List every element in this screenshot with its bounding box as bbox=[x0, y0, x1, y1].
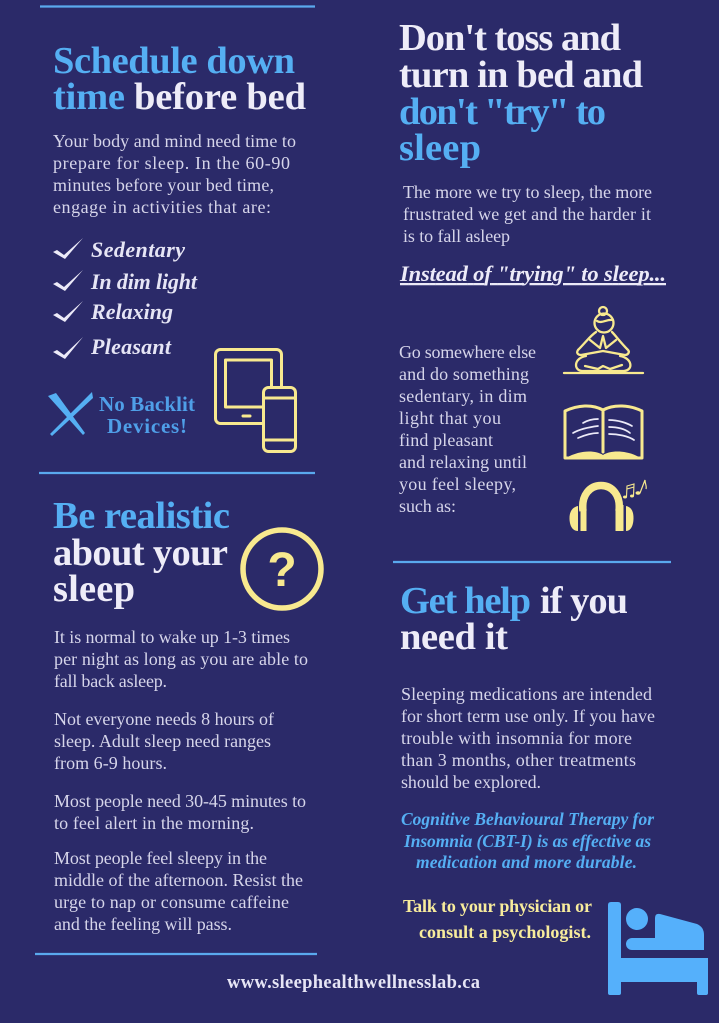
icon: question mark bbox=[243, 530, 321, 608]
text block: morning alertness: Most people need 30-45 minutes to bbox=[54, 791, 306, 811]
heading: be realistic about your sleep: sleep bbox=[53, 568, 135, 610]
text block: trying to sleep: The more we try to sleep, the more bbox=[403, 182, 652, 202]
item: pleasant: Pleasant bbox=[90, 334, 172, 359]
icon: person in bed bbox=[608, 902, 708, 995]
text block: afternoon sleepiness: middle of the afternoon. Resist the bbox=[54, 870, 303, 890]
callout: cognitive behavioural therapy: medication and more durable. bbox=[416, 852, 637, 872]
text block: sleeping medications: should be explored. bbox=[401, 772, 541, 792]
text block: prepare for sleep: engage in activities that are: bbox=[53, 197, 271, 217]
text block: afternoon sleepiness bbox=[54, 848, 303, 934]
text block: go somewhere else: and do something bbox=[399, 364, 529, 384]
heading: don't toss and turn: don't "try" to bbox=[399, 91, 606, 133]
text block: go somewhere else: find pleasant bbox=[399, 430, 493, 450]
item: pleasant bbox=[53, 334, 172, 359]
text block: go somewhere else bbox=[399, 342, 536, 516]
heading: don't toss and turn: sleep bbox=[399, 127, 481, 169]
heading: get help: Get help bbox=[400, 580, 531, 622]
heading: schedule down time before bed: time bbox=[53, 76, 125, 118]
heading: get help: if you bbox=[540, 580, 628, 622]
text block: sleeping medications bbox=[401, 684, 655, 792]
text block: trying to sleep: frustrated we get and the harder it bbox=[403, 204, 651, 224]
website url: www.sleephealthwellnesslab.ca bbox=[227, 973, 480, 993]
text block: sleeping medications: Sleeping medications are intended bbox=[401, 684, 652, 704]
heading: schedule down time before bed: before bed bbox=[134, 76, 306, 118]
text block: trying to sleep: is to fall asleep bbox=[403, 226, 510, 246]
heading: schedule down time before bed: Schedule down bbox=[53, 40, 295, 82]
text block: sleep need: Not everyone needs 8 hours of bbox=[54, 709, 274, 729]
text block: go somewhere else: and relaxing until bbox=[399, 452, 527, 472]
checklist: recommended activities bbox=[53, 237, 198, 359]
label: no backlit devices: No Backlit bbox=[99, 392, 195, 416]
label: no backlit devices bbox=[99, 392, 195, 438]
icon: blue cross bbox=[48, 392, 93, 436]
icon: open book bbox=[565, 406, 642, 458]
heading: be realistic about your sleep: Be realistic bbox=[53, 495, 230, 537]
text block: sleeping medications: trouble with insomnia for more bbox=[401, 728, 632, 748]
text block: waking at night bbox=[54, 627, 308, 691]
heading: schedule down time before bed bbox=[53, 40, 306, 118]
text block: go somewhere else: you feel sleepy, bbox=[399, 474, 516, 494]
text block: prepare for sleep: minutes before your bed time, bbox=[53, 175, 274, 195]
text block: go somewhere else: light that you bbox=[399, 408, 501, 428]
heading: be realistic about your sleep: about your bbox=[53, 532, 228, 574]
heading: get help bbox=[400, 580, 628, 658]
callout: cognitive behavioural therapy: Cognitive Behavioural Therapy for bbox=[401, 809, 654, 829]
text block: prepare for sleep: Your body and mind need time to bbox=[53, 131, 296, 151]
subheading: instead of trying: Instead of "trying" to sleep... bbox=[399, 261, 666, 286]
text block: waking at night: fall back asleep. bbox=[54, 671, 167, 691]
text block: sleeping medications: for short term use only. If you have bbox=[401, 706, 655, 726]
heading: be realistic about your sleep bbox=[53, 495, 230, 610]
text block: sleep need: from 6-9 hours. bbox=[54, 753, 167, 773]
icon: meditating person bbox=[564, 307, 643, 373]
icon: tablet and phone bbox=[216, 350, 296, 452]
item: in dim light: In dim light bbox=[90, 269, 198, 294]
callout: cognitive behavioural therapy bbox=[401, 809, 654, 872]
text block: afternoon sleepiness: and the feeling will pass. bbox=[54, 914, 232, 934]
text block: morning alertness bbox=[54, 791, 306, 833]
heading: don't toss and turn: Don't toss and bbox=[399, 17, 621, 59]
text block: go somewhere else: such as: bbox=[399, 496, 456, 516]
text block: prepare for sleep: prepare for sleep. In the 60-90 bbox=[53, 153, 290, 173]
item: relaxing bbox=[53, 299, 173, 324]
text block: waking at night: It is normal to wake up 1-3 times bbox=[54, 627, 290, 647]
heading: don't toss and turn bbox=[399, 17, 643, 169]
icon: question mark: ? bbox=[267, 544, 297, 597]
callout: talk to your physician: consult a psychologist. bbox=[419, 922, 591, 942]
text block: sleep need bbox=[54, 709, 274, 773]
text block: go somewhere else: sedentary, in dim bbox=[399, 386, 527, 406]
heading: get help: need it bbox=[400, 616, 508, 658]
icon: headphones with notes bbox=[570, 480, 646, 531]
item: relaxing: Relaxing bbox=[90, 299, 173, 324]
text block: go somewhere else: Go somewhere else bbox=[399, 342, 536, 362]
label: no backlit devices: Devices! bbox=[107, 414, 187, 438]
text block: sleeping medications: than 3 months, other treatments bbox=[401, 750, 636, 770]
callout: talk to your physician: Talk to your physician or bbox=[403, 896, 592, 916]
text block: prepare for sleep bbox=[53, 131, 296, 217]
heading: don't toss and turn: turn in bed and bbox=[399, 54, 643, 96]
item: sedentary: Sedentary bbox=[91, 237, 185, 262]
text block: trying to sleep bbox=[403, 182, 652, 246]
text block: morning alertness: to feel alert in the morning. bbox=[54, 813, 254, 833]
callout: cognitive behavioural therapy: Insomnia (CBT-I) is as effective as bbox=[403, 831, 651, 851]
text block: waking at night: per night as long as you are able to bbox=[54, 649, 308, 669]
text block: afternoon sleepiness: Most people feel sleepy in the bbox=[54, 848, 267, 868]
text block: sleep need: sleep. Adult sleep need ranges bbox=[54, 731, 271, 751]
callout: talk to your physician bbox=[403, 896, 592, 942]
text block: afternoon sleepiness: urge to nap or consume caffeine bbox=[54, 892, 289, 912]
